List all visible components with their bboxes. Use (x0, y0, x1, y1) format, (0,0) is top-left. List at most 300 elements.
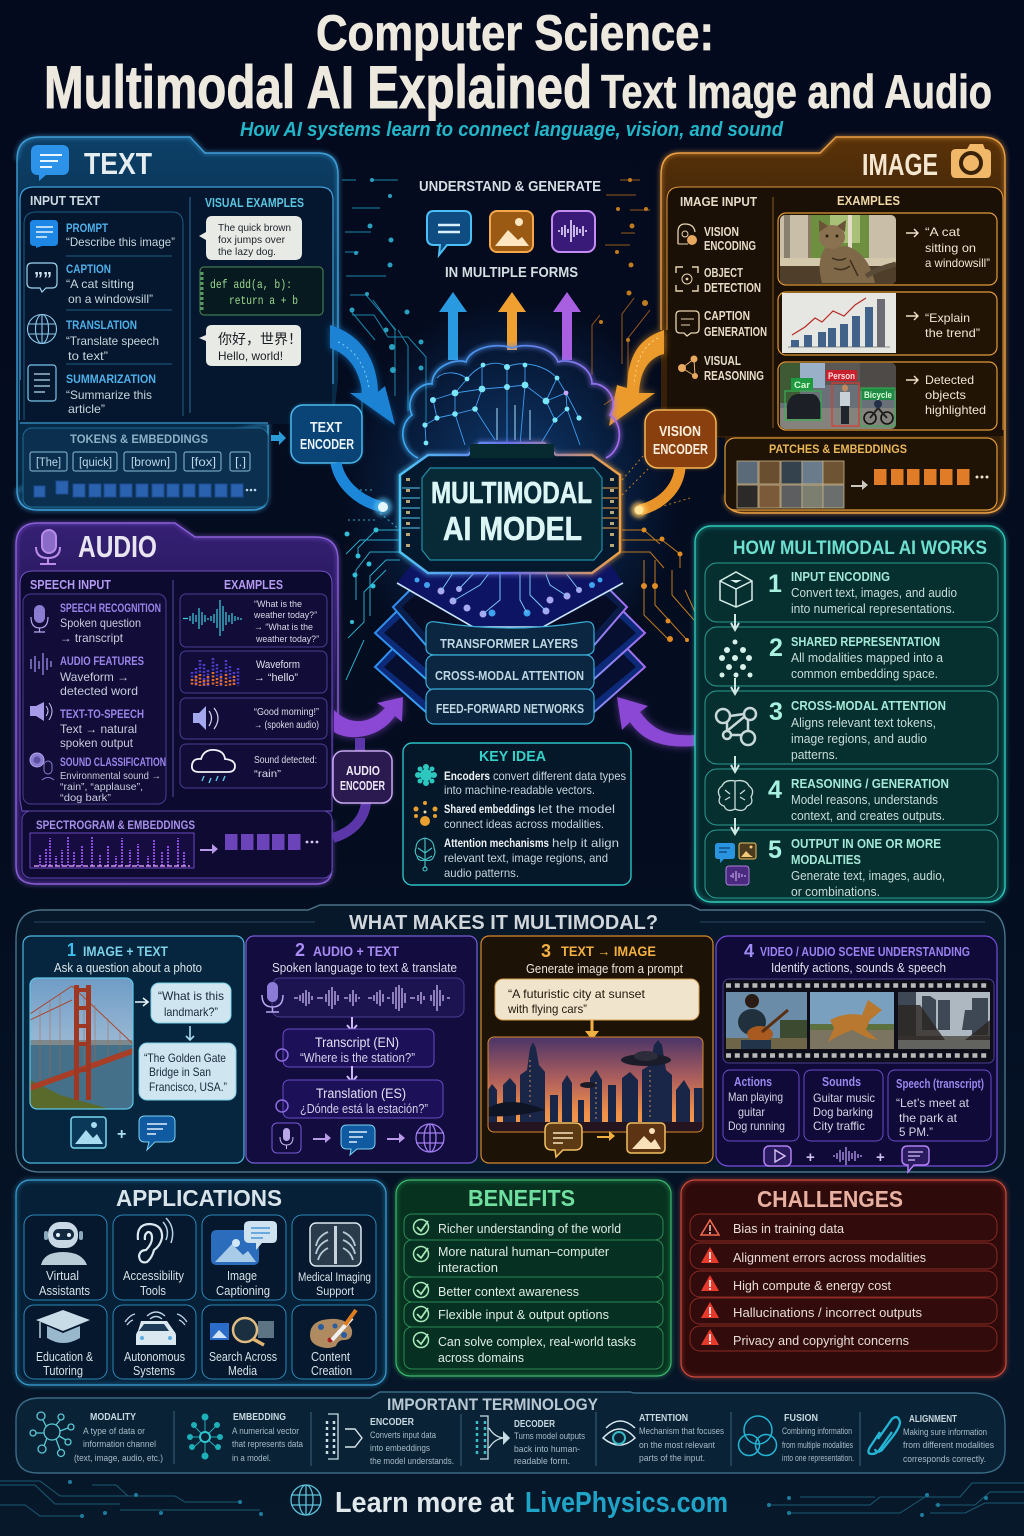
heading: terminology: IMPORTANT TERMINOLOGY (387, 1395, 599, 1414)
chip: multimodal AI model: MULTIMODAL (431, 475, 592, 510)
example: text bubble: The quick brown (218, 222, 291, 234)
card 4: video / audio scene: 4 (744, 941, 754, 961)
heading: WHAT MAKES IT MULTIMODAL? (349, 912, 658, 934)
example: object detection photo: objects (925, 388, 966, 402)
heading: challenges: CHALLENGES (757, 1186, 903, 1212)
column: speech: the park at (899, 1111, 958, 1125)
example: code: def add(a, b): (210, 278, 292, 292)
item: visual reasoning: VISUAL (704, 354, 741, 368)
text: shared embeddings: connect ideas across modalities. (444, 817, 604, 831)
step 1: 1 (768, 570, 782, 598)
example: trend chart: “Explain (925, 311, 970, 325)
example: text bubble (199, 216, 302, 260)
patches and embeddings (725, 438, 997, 510)
item: text to speech: Text → natural (60, 722, 137, 736)
box: audio encoder: AUDIO (346, 763, 380, 778)
step 3 (705, 691, 998, 764)
example: text bubble: the lazy dog. (218, 246, 276, 258)
step 2: All modalities mapped into a (791, 651, 943, 665)
footer circuit traces (0, 1480, 1024, 1518)
arrow: audio to stack right side (617, 697, 695, 747)
term: decoder: back into human- (514, 1444, 580, 1455)
label: cross-modal attention (426, 655, 594, 690)
term: alignment: Making sure information (903, 1427, 987, 1438)
heading: IMAGE: IMAGE (862, 147, 938, 182)
step 4: REASONING / GENERATION (791, 776, 949, 791)
text: encoders: into machine-readable vectors. (444, 783, 595, 797)
box: audio encoder (333, 751, 392, 803)
spectrogram and embeddings (22, 811, 332, 878)
film frame: city (898, 992, 990, 1049)
chip: multimodal AI model: AI MODEL (443, 510, 582, 547)
column: speech: “Let’s meet at (896, 1096, 970, 1110)
example: object detection photo: Person (828, 371, 855, 382)
column: sounds: Sounds (822, 1074, 861, 1089)
example: cat photo: a windowsill” (925, 256, 990, 270)
card 1: image + text: “The Golden Gate (144, 1051, 226, 1065)
text: attention: help it align (552, 836, 619, 850)
term: modality: MODALITY (90, 1411, 136, 1423)
film frame: dog (810, 992, 894, 1049)
step 1: into numerical representations. (791, 602, 955, 616)
item: object detection (676, 266, 761, 295)
challenge: bias: Bias in training data (733, 1221, 845, 1236)
connector: encoder to stack (355, 738, 365, 751)
item: translation (28, 314, 159, 363)
card 3: text to image (481, 936, 713, 1163)
term: attention: parts of the input. (639, 1453, 705, 1464)
example: object detection photo: Car (794, 380, 810, 391)
text: encoders (444, 769, 626, 797)
tile: image captioning (202, 1215, 286, 1300)
term: embedding: EMBEDDING (233, 1411, 286, 1423)
item: summarization (28, 365, 156, 416)
card 3: text to image: with flying cars” (507, 1002, 587, 1016)
text: shared embeddings: let the model (538, 802, 615, 816)
arrow: up orange (498, 292, 526, 350)
label: feed-forward networks: FEED-FORWARD NETWORKS (436, 701, 584, 716)
card 1: image + text: Francisco, USA.” (149, 1080, 227, 1094)
card 3: text to image: “A futuristic city at sunset (508, 987, 646, 1001)
step 3: image regions, and audio (791, 732, 927, 746)
item: object detection: DETECTION (704, 281, 761, 295)
column: speech: Speech (transcript) (896, 1076, 984, 1091)
example: hello spectrogram (180, 651, 327, 693)
example: cat photo: sitting on (925, 241, 976, 255)
item: sound classification (30, 753, 166, 804)
challenge: hallucinations: Hallucinations / incorrect outputs (733, 1305, 922, 1320)
card 1: image + text: landmark?” (164, 1005, 218, 1019)
term: embedding: A numerical vector (232, 1426, 299, 1437)
item: text to speech: TEXT-TO-SPEECH (60, 709, 144, 721)
example: code (200, 267, 323, 315)
icon: shared embeddings (414, 801, 438, 826)
heading: how it works: HOW MULTIMODAL AI WORKS (733, 538, 987, 559)
term: fusion: from multiple modalities (782, 1440, 853, 1451)
item: object detection: OBJECT (704, 266, 743, 280)
item: caption (27, 262, 153, 306)
footer text: LivePhysics.com (525, 1487, 728, 1519)
item: audio features: Waveform → (60, 670, 129, 684)
heading: applications: APPLICATIONS (116, 1185, 282, 1211)
step 3: 3 (769, 698, 783, 726)
chip: multimodal AI model (400, 443, 620, 573)
item: caption: ” (34, 269, 43, 289)
model stack: layered platters (375, 564, 645, 713)
heading: TEXT: TEXT (84, 146, 152, 181)
tokens and embeddings: TOKENS & EMBEDDINGS (70, 434, 208, 446)
step 2: common embedding space. (791, 667, 938, 681)
benefit: complex tasks: across domains (438, 1350, 524, 1365)
term: fusion: FUSION (784, 1412, 818, 1424)
example: speech waveform (180, 594, 327, 647)
example: object detection photo (778, 362, 997, 430)
panel: IMAGE (661, 137, 1005, 513)
spectrogram and embeddings: SPECTROGRAM & EMBEDDINGS (36, 818, 195, 832)
term: alignment: corresponds correctly. (903, 1454, 986, 1465)
icon: microphone (36, 530, 60, 564)
item: summarization: SUMMARIZATION (66, 372, 156, 386)
tile: autonomous systems (113, 1305, 196, 1379)
term: encoder: Converts input data (370, 1430, 437, 1441)
item: prompt: PROMPT (66, 221, 109, 235)
column: sounds: Dog barking (813, 1105, 873, 1119)
icon: attention (415, 838, 435, 871)
item: speech recognition: → transcript (60, 631, 124, 645)
term: embedding (187, 1411, 304, 1464)
heading: key idea: KEY IDEA (479, 748, 546, 765)
step arrows (731, 614, 739, 834)
step 5 (705, 830, 998, 899)
term: decoder (477, 1416, 585, 1467)
item: text to speech: spoken output (60, 736, 134, 750)
tile: content creation: Content (311, 1350, 350, 1364)
example: translation bubble: Hello, world! (218, 349, 283, 363)
item: translation: to text” (68, 349, 108, 363)
term: attention: on the most relevant (639, 1440, 715, 1451)
column: sounds: City traffic (813, 1119, 865, 1133)
example: rain sound: “rain” (254, 768, 282, 780)
example: speech waveform: → “What is the (254, 622, 313, 633)
item: summarization: “Summarize this (66, 388, 152, 402)
card 1: image + text: IMAGE + TEXT (83, 943, 168, 959)
tile: education and tutoring: Tutoring (43, 1364, 83, 1378)
item: audio features: AUDIO FEATURES (60, 656, 144, 668)
term: fusion: Combining information (782, 1426, 852, 1437)
circuit traces around the model (342, 178, 695, 680)
tile: virtual assistants: Assistants (39, 1284, 90, 1298)
benefit: richer understanding: Richer understanding of the world (438, 1221, 621, 1236)
text: encoders: Encoders (444, 769, 490, 783)
card 1: image + text: 1 (67, 940, 76, 960)
column: actions (728, 1074, 785, 1133)
challenge: privacy: Privacy and copyright concerns (733, 1333, 909, 1348)
tile: search across media: Search Across (209, 1350, 277, 1364)
example: object detection photo: highlighted (925, 403, 986, 417)
panel: challenges (681, 1180, 1006, 1377)
text: attention: Attention mechanisms (444, 836, 549, 850)
label: transformer layers (426, 622, 594, 655)
benefit: natural interaction: interaction (438, 1260, 498, 1275)
icon: camera (951, 144, 991, 178)
tokens and embeddings: [The] (36, 457, 61, 469)
benefit: complex tasks: Can solve complex, real-world tasks (438, 1334, 636, 1349)
card 4: video / audio scene: + (876, 1149, 885, 1166)
card 1: image + text: Ask a question about a photo (54, 961, 202, 975)
tile: image captioning: Captioning (216, 1284, 270, 1298)
term: attention (603, 1412, 724, 1464)
tile: medical imaging (292, 1215, 376, 1300)
text: attention: relevant text, image regions, and (444, 851, 608, 865)
tokens and embeddings (23, 428, 268, 507)
column: actions: Dog running (728, 1119, 785, 1133)
item: summarization: article” (68, 402, 105, 416)
step 4: Model reasons, understands (791, 793, 938, 807)
term: modality: A type of data or (83, 1426, 145, 1437)
step 3: CROSS-MODAL ATTENTION (791, 698, 946, 713)
card 4: video / audio scene (716, 936, 997, 1172)
box: vision encoder: VISION (659, 424, 701, 440)
arrow: tokens to text encoder (271, 431, 286, 445)
item: caption generation: GENERATION (704, 325, 767, 339)
tokens and embeddings: [brown] (131, 457, 170, 469)
item: caption: on a windowsill” (68, 292, 153, 306)
card 3: text to image: TEXT → IMAGE (561, 943, 656, 959)
card 2: audio + text: AUDIO + TEXT (313, 943, 399, 959)
connector: audio spectrogram to encoder (333, 803, 366, 838)
step 5: 5 (768, 836, 782, 864)
footer text (335, 1487, 728, 1519)
heading: benefits: BENEFITS (468, 1185, 575, 1211)
film frame: guitarist (726, 992, 807, 1049)
example: spoken audio: → (spoken audio) (254, 720, 319, 731)
panel: benefits (396, 1180, 671, 1376)
term: attention: ATTENTION (639, 1412, 688, 1424)
step 4 (705, 769, 998, 825)
card 2: audio + text: Transcript (EN) (315, 1035, 399, 1050)
example: speech waveform: weather today?” (255, 634, 319, 645)
column: actions: guitar (738, 1105, 765, 1119)
arrow: image panel into model (609, 330, 664, 426)
heading: understand and generate: UNDERSTAND & GENERATE (419, 178, 601, 195)
patches and embeddings: PATCHES & EMBEDDINGS (769, 442, 907, 456)
connector: vision encoder to model (631, 468, 680, 518)
term: modality: (text, image, audio, etc.) (74, 1453, 163, 1464)
card 4: video / audio scene: + (806, 1149, 815, 1166)
subheading: examples: EXAMPLES (224, 577, 283, 592)
arrow: text panel into model (330, 325, 395, 425)
example: hello spectrogram: → “hello” (254, 672, 298, 684)
subheading: visual examples: VISUAL EXAMPLES (205, 195, 304, 210)
text: encoders: convert different data types (493, 769, 626, 783)
box: text encoder: ENCODER (300, 436, 354, 453)
item: translation: “Translate speech (66, 334, 159, 348)
subheading: speech input: SPEECH INPUT (30, 577, 111, 592)
tile: image captioning: Image (227, 1269, 257, 1283)
item: caption: “A cat sitting (66, 277, 134, 291)
card 3: text to image: 3 (541, 941, 551, 961)
item: speech recognition: SPEECH RECOGNITION (60, 603, 161, 615)
step 4: 4 (768, 776, 782, 804)
icon: neural brain (403, 346, 619, 458)
icon: output text (427, 211, 471, 255)
item: caption: CAPTION (66, 262, 111, 276)
photo: golden gate (30, 978, 133, 1109)
term: embedding: that represents data (232, 1439, 304, 1450)
tokens and embeddings: [.] (235, 457, 246, 469)
challenge: compute cost: High compute & energy cost (733, 1278, 891, 1293)
example: trend chart (778, 292, 997, 355)
item: translation: TRANSLATION (66, 318, 137, 332)
term: modality (30, 1411, 163, 1464)
icon: output image (490, 211, 533, 252)
example: cat photo: “A cat (925, 225, 961, 239)
tile: accessibility tools (113, 1215, 196, 1300)
arrow: up blue (439, 292, 467, 360)
panel: important terminology (16, 1392, 1005, 1473)
step 1 (705, 563, 998, 622)
term: encoder: the model understands. (370, 1456, 454, 1467)
item: vision encoding: VISION (704, 225, 739, 239)
card 4: video / audio scene: VIDEO / AUDIO SCENE UNDERSTANDING (760, 945, 970, 959)
step 5: OUTPUT IN ONE OR MORE (791, 836, 941, 851)
example: spoken audio (180, 698, 327, 739)
text: attention (444, 836, 619, 880)
card 3: text to image: Generate image from a prompt (526, 962, 683, 976)
card 1: image + text: Bridge in San (149, 1065, 211, 1079)
column: speech: 5 PM.” (899, 1125, 933, 1139)
column: speech (896, 1076, 984, 1139)
term: alignment: from different modalities (903, 1440, 994, 1451)
panel: AUDIO (16, 523, 338, 884)
example: object detection photo: Bicycle (864, 390, 892, 401)
card 1: image + text: + (117, 1126, 126, 1143)
term: fusion (738, 1412, 854, 1464)
icon: output audio (552, 211, 595, 252)
example: spoken audio: “Good morning!” (254, 707, 319, 718)
step 2: 2 (769, 634, 783, 662)
benefit: natural interaction: More natural human–computer (438, 1244, 610, 1259)
card 1: image + text (23, 936, 244, 1163)
term: encoder: ENCODER (370, 1416, 414, 1428)
item: caption generation (676, 309, 767, 339)
challenge: alignment errors (701, 1247, 926, 1265)
heading: in multiple forms: IN MULTIPLE FORMS (445, 264, 578, 281)
example: translation bubble (199, 325, 302, 366)
step 2: SHARED REPRESENTATION (791, 634, 940, 649)
text: shared embeddings (444, 802, 615, 831)
tile: medical imaging: Medical Imaging (298, 1272, 371, 1284)
box: audio encoder: ENCODER (340, 778, 385, 793)
panel: what makes it multimodal (16, 905, 1005, 1172)
item: visual reasoning (678, 354, 764, 383)
example: translation bubble: 你好，世界！ (218, 331, 302, 347)
example: text bubble: fox jumps over (218, 234, 285, 246)
icon: encoders (415, 764, 437, 786)
item: vision encoding (678, 224, 756, 253)
column: sounds (813, 1074, 875, 1133)
term: decoder: readable form. (514, 1456, 570, 1467)
text: shared embeddings: Shared embeddings (444, 802, 535, 816)
item: caption: ” (43, 269, 52, 289)
step 4: context, and creates outputs. (791, 809, 945, 823)
benefit: context awareness: Better context awareness (438, 1284, 579, 1299)
item: prompt: “Describe this image” (66, 235, 175, 249)
term: decoder: DECODER (514, 1418, 555, 1430)
image: futuristic city (488, 1037, 703, 1132)
label: feed-forward networks (426, 689, 594, 724)
tile: accessibility tools: Tools (140, 1284, 166, 1298)
tile: virtual assistants (24, 1215, 107, 1300)
item: speech recognition: Spoken question (60, 616, 141, 630)
card 2: audio + text: ¿Dónde está la estación?” (300, 1102, 428, 1116)
heading: AUDIO: AUDIO (78, 529, 157, 564)
title: Computer Science: (316, 5, 714, 61)
subheading: input text: INPUT TEXT (30, 193, 100, 208)
card 2: audio + text: Spoken language to text & translate (272, 961, 457, 975)
card 2: audio + text: Translation (ES) (316, 1086, 406, 1101)
step 1: Convert text, images, and audio (791, 586, 957, 600)
card 4: video / audio scene: Identify actions, sounds & speech (771, 961, 946, 975)
tile: content creation: Creation (311, 1364, 352, 1378)
tile: content creation (292, 1305, 376, 1379)
tokens and embeddings: [fox] (191, 457, 216, 469)
tile: autonomous systems: Autonomous (124, 1350, 185, 1364)
box: vision encoder (645, 410, 716, 468)
label: transformer layers: TRANSFORMER LAYERS (440, 636, 578, 651)
step 1: INPUT ENCODING (791, 569, 890, 584)
panel: key idea (403, 743, 631, 885)
arrow: up purple (553, 292, 581, 360)
example: rain sound (180, 744, 327, 788)
item: sound classification: “rain”, “applause”, (60, 782, 143, 793)
term: decoder: Turns model outputs (514, 1431, 585, 1442)
item: speech recognition (31, 603, 161, 645)
step 5: or combinations. (791, 885, 880, 899)
icon: text bubble (31, 145, 69, 181)
challenge: privacy (701, 1329, 909, 1348)
text: attention: audio patterns. (444, 866, 519, 880)
box: vision encoder: ENCODER (653, 442, 708, 458)
term: alignment (868, 1413, 994, 1465)
step 5: Generate text, images, audio, (791, 869, 945, 883)
item: caption generation: CAPTION (704, 309, 750, 323)
item: audio features (31, 653, 144, 698)
tokens and embeddings: [quick] (79, 457, 112, 469)
term: modality: information channel (83, 1439, 156, 1450)
icon: globe (291, 1485, 321, 1515)
term: fusion: into one representation. (782, 1453, 854, 1464)
subheading: examples: EXAMPLES (837, 193, 900, 208)
connector: text encoder to model (336, 463, 392, 516)
term: alignment: ALIGNMENT (909, 1413, 957, 1425)
arrow: audio panel into model (334, 697, 403, 737)
example: speech waveform: “What is the (254, 599, 302, 610)
card 2: audio + text (246, 936, 477, 1163)
panel: how multimodal AI works (695, 526, 1005, 902)
card 2: audio + text: 2 (295, 940, 305, 960)
column: sounds: Guitar music (813, 1091, 875, 1105)
title: Multimodal AI Explained (44, 54, 592, 121)
box: text encoder: TEXT (310, 419, 342, 436)
card 2: audio + text: “Where is the station?” (300, 1051, 415, 1065)
item: text to speech (30, 702, 144, 750)
tile: education and tutoring: Education & (36, 1350, 94, 1364)
term: attention: Mechanism that focuses (639, 1426, 724, 1437)
step 5: MODALITIES (791, 852, 861, 867)
item: sound classification: Environmental sound → (60, 771, 161, 782)
title (44, 5, 992, 121)
